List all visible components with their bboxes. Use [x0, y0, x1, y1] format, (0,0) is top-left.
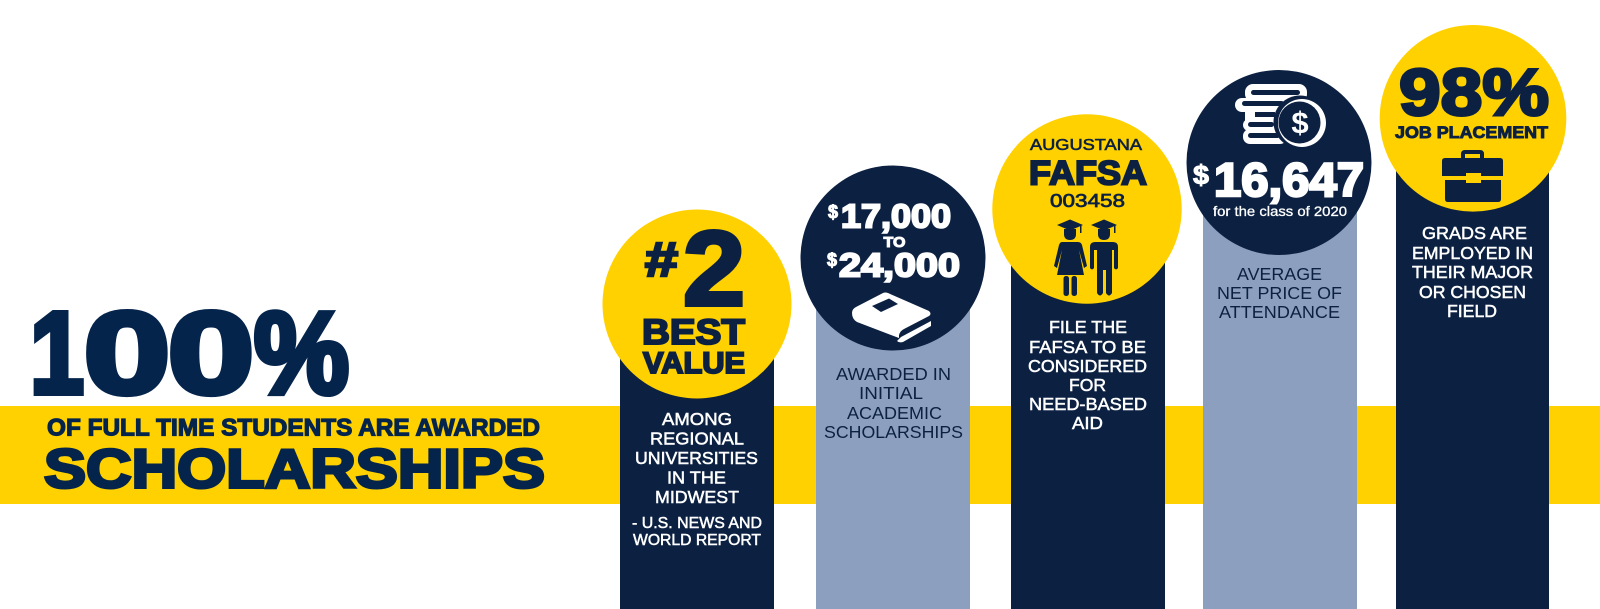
FAFSA code text: 003458 — [1050, 191, 1125, 211]
icon: graduates — [1054, 220, 1118, 296]
description: CONSIDERED — [1028, 356, 1147, 376]
description: FOR — [1069, 375, 1106, 395]
description: NET PRICE OF — [1217, 283, 1342, 303]
amount: 16,647 — [1214, 153, 1364, 206]
description: UNIVERSITIES — [635, 448, 758, 468]
description — [824, 364, 963, 442]
description: EMPLOYED IN — [1412, 243, 1533, 263]
yellow horizontal band — [0, 406, 1600, 504]
column — [620, 300, 774, 609]
column — [816, 300, 970, 609]
circle — [992, 114, 1182, 304]
big stat: 100%: 0 — [168, 288, 254, 418]
heading: scholarships: SCHOLARSHIPS — [44, 438, 545, 500]
description: FAFSA TO BE — [1029, 337, 1146, 357]
description: MIDWEST — [655, 487, 739, 507]
description: SCHOLARSHIPS — [824, 422, 963, 442]
panel: job placement — [1380, 25, 1566, 609]
description: ACADEMIC — [847, 403, 942, 423]
best value label: VALUE — [643, 347, 745, 380]
stat: 98%: 98% — [1399, 55, 1549, 129]
best value label — [642, 313, 745, 380]
subheading line: OF FULL TIME STUDENTS ARE AWARDED — [47, 414, 540, 442]
icon: coins: $ — [1291, 105, 1309, 140]
description: AWARDED IN — [836, 364, 951, 384]
big stat: 100%: 0 — [84, 288, 170, 418]
description — [632, 409, 762, 549]
description: AVERAGE — [1237, 264, 1322, 284]
description: - U.S. NEWS AND — [632, 515, 762, 532]
description: ATTENDANCE — [1219, 302, 1340, 322]
description — [1028, 317, 1147, 433]
amount: for the class of 2020 — [1213, 203, 1347, 219]
description: FILE THE — [1049, 317, 1127, 337]
icon: briefcase — [1442, 150, 1503, 202]
amount — [1193, 153, 1364, 219]
headline: 100% of full time students awarded scholarships — [30, 288, 545, 500]
amount range: 17,000 — [841, 198, 951, 234]
circle — [1380, 25, 1566, 212]
FAFSA code text: FAFSA — [1029, 154, 1147, 192]
circle — [800, 166, 986, 350]
best value label: BEST — [642, 313, 745, 352]
column — [1203, 200, 1357, 609]
description: GRADS ARE — [1422, 223, 1527, 243]
amount range: 24,000 — [839, 246, 960, 284]
FAFSA code text — [1029, 137, 1147, 211]
description: AMONG — [662, 409, 732, 429]
panel: best value — [602, 210, 792, 609]
big stat: 100%: 1 — [30, 288, 84, 418]
description: NEED-BASED — [1029, 394, 1147, 414]
rank #2 — [645, 210, 745, 328]
panel: FAFSA — [992, 114, 1182, 609]
description — [1217, 264, 1342, 322]
description: INITIAL — [859, 383, 923, 403]
icon: book — [852, 292, 931, 342]
amount range: $ — [827, 250, 837, 270]
panel: academic scholarships — [800, 166, 986, 609]
column — [1396, 160, 1549, 609]
description: OR CHOSEN — [1419, 282, 1526, 302]
description: WORLD REPORT — [633, 532, 761, 549]
description — [1412, 223, 1533, 321]
column — [1011, 250, 1165, 609]
description: THEIR MAJOR — [1412, 262, 1533, 282]
description: REGIONAL — [650, 428, 744, 448]
FAFSA code text: AUGUSTANA — [1030, 137, 1142, 154]
amount range: TO — [884, 234, 906, 251]
description: IN THE — [667, 468, 726, 488]
amount: $ — [1193, 160, 1209, 190]
description: AID — [1072, 413, 1103, 433]
icon: coins — [1235, 84, 1326, 148]
circle — [602, 210, 792, 398]
description: FIELD — [1447, 301, 1497, 321]
panel: net price — [1186, 70, 1372, 609]
big stat: 100%: % — [254, 288, 349, 418]
rank #2: # — [645, 234, 678, 287]
circle — [1186, 70, 1372, 255]
amount range: $ — [828, 202, 838, 222]
label: job placement: JOB PLACEMENT — [1395, 124, 1548, 142]
amount range — [827, 198, 960, 284]
rank #2: 2 — [683, 210, 745, 328]
